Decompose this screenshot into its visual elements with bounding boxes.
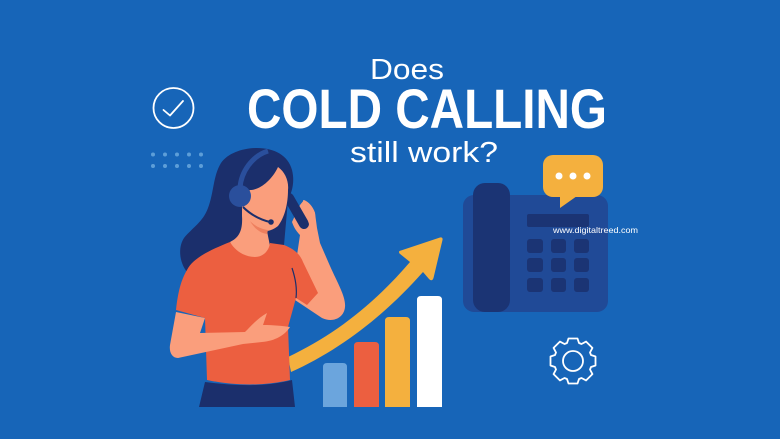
fingers on phone bbox=[303, 200, 316, 226]
title bbox=[247, 54, 607, 169]
website url: www.digitaltreed.com bbox=[552, 225, 638, 235]
icon: check circle bbox=[154, 88, 194, 128]
headset bbox=[229, 151, 274, 225]
desk phone bbox=[463, 183, 608, 312]
phone screen bbox=[527, 214, 589, 227]
dot grid bbox=[151, 152, 203, 168]
icon: gear bbox=[550, 338, 596, 384]
shirt bbox=[176, 242, 318, 384]
title: still work? bbox=[350, 137, 498, 169]
bar chart bbox=[323, 296, 442, 407]
title: COLD CALLING bbox=[247, 77, 607, 140]
neck and face bbox=[230, 167, 288, 258]
shirt fold bbox=[292, 268, 296, 298]
growth arrow bbox=[288, 237, 443, 372]
handset bbox=[473, 183, 510, 312]
left arm and hand bbox=[170, 312, 290, 358]
speech bubble bbox=[543, 155, 603, 208]
neck shadow bbox=[250, 221, 268, 234]
phone base bbox=[463, 195, 608, 312]
phone handset in hand bbox=[289, 198, 304, 224]
woman with headset bbox=[170, 148, 345, 407]
keypad bbox=[527, 239, 589, 292]
title: Does bbox=[370, 54, 444, 86]
hair bbox=[180, 148, 293, 272]
pants bbox=[199, 380, 295, 407]
right arm bbox=[292, 200, 345, 320]
